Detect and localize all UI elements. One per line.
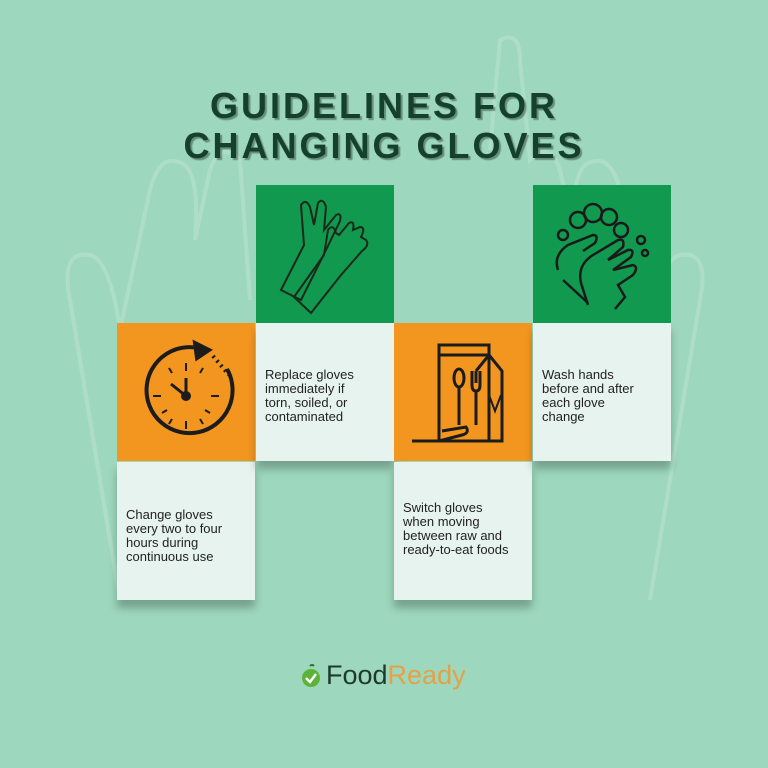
text box — [117, 462, 255, 600]
icon: apple check — [302, 664, 320, 687]
icon: washing hands — [533, 185, 671, 323]
logo: FoodReady: FoodReady — [326, 660, 466, 690]
text box: Change gloves every two to four hours during continuous use — [126, 507, 222, 564]
panel: change every two to four hours — [112, 323, 260, 612]
panel: replace torn gloves — [252, 185, 398, 474]
title — [183, 85, 585, 166]
title: GUIDELINES FOR — [210, 85, 558, 126]
text box — [533, 323, 671, 461]
panel: wash hands — [528, 185, 676, 474]
panel: switch gloves raw/ready-to-eat — [390, 323, 536, 612]
title: CHANGING GLOVES — [183, 125, 585, 166]
icon: gloves — [256, 185, 394, 323]
icon: clock — [117, 323, 255, 461]
text box: Replace gloves immediately if torn, soiled, or contaminated — [265, 367, 354, 424]
text box — [256, 323, 394, 461]
text box — [394, 462, 532, 600]
icon: food bag — [394, 323, 532, 461]
text box: Wash hands before and after each glove change — [542, 367, 634, 424]
text box: Switch gloves when moving between raw and ready-to-eat foods — [403, 500, 509, 557]
